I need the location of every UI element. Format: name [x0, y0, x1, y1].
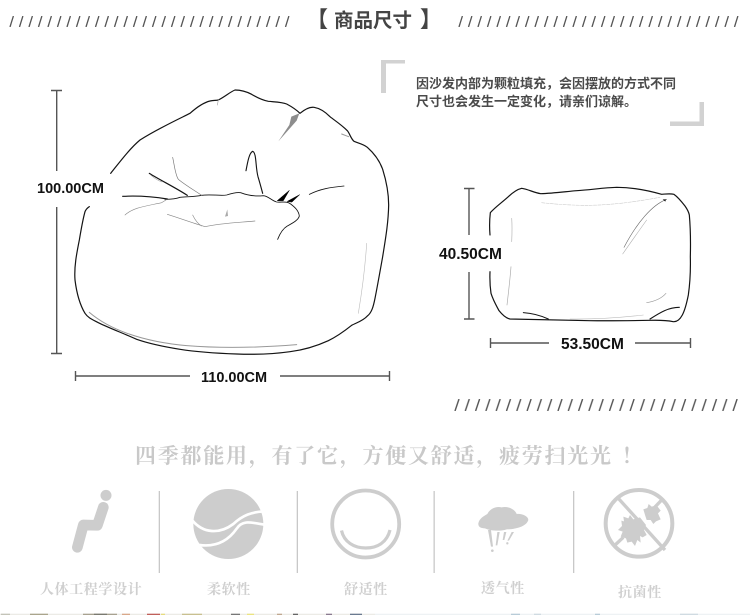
- note corner: bottom right bracket: [670, 102, 704, 126]
- divider 1: [159, 491, 160, 573]
- dimension: footstool height: [464, 188, 474, 319]
- icon: soft ball: [192, 489, 265, 559]
- label: footstool height: 40.50CM: [439, 246, 502, 263]
- icon: breathable cloud: [478, 507, 528, 552]
- inner fold lines: [542, 197, 660, 205]
- title: [306, 2, 442, 34]
- divider 3: [434, 491, 435, 573]
- feature labels: 抗菌性: [618, 582, 662, 602]
- feature labels: 舒适性: [344, 579, 388, 599]
- hook fold: [246, 151, 263, 193]
- label: chair height: 100.00CM: [37, 181, 104, 197]
- note text: [416, 73, 676, 110]
- gray crease: [278, 113, 299, 141]
- faint right edge line: [358, 243, 367, 313]
- label: chair width: 110.00CM: [201, 370, 267, 386]
- divider 2: [297, 491, 298, 573]
- bean bag chair drawing: [75, 90, 389, 354]
- black wedges: [277, 190, 289, 201]
- chair outline: [75, 90, 389, 354]
- dimension: chair width: [76, 371, 390, 381]
- label: footstool width: 53.50CM: [561, 336, 624, 353]
- slash band: lower right: [454, 399, 738, 411]
- slash band: top right: [458, 16, 743, 27]
- note text: 因沙发内部为颗粒填充，会因摆放的方式不同: [416, 73, 676, 92]
- footstool outline: [490, 187, 691, 322]
- title: 【: [306, 2, 328, 34]
- bottom colour strip: [0, 614, 750, 615]
- headline: 四季都能用，有了它，方便又舒适，疲劳扫光光 ！: [135, 440, 644, 470]
- slash band: top left: [9, 16, 294, 27]
- footstool drawing: [490, 187, 691, 322]
- dimension: chair height: [51, 90, 62, 354]
- divider 4: [573, 491, 574, 573]
- seat folds: [123, 196, 167, 199]
- title: 】: [420, 2, 442, 34]
- dimension: footstool width: [490, 338, 690, 348]
- note text: 尺寸也会发生一定变化，请亲们谅解。: [416, 91, 637, 110]
- title: 商品尺寸: [334, 4, 412, 33]
- feature labels: 柔软性: [207, 579, 251, 599]
- icon: antibacterial: [606, 490, 672, 557]
- icon: smile: [332, 490, 399, 558]
- icon: seated person: [77, 490, 111, 547]
- feature labels: 透气性: [481, 578, 525, 598]
- feature labels: 人体工程学设计: [40, 579, 142, 599]
- feature labels: [40, 578, 662, 602]
- note corner: top left bracket: [381, 60, 405, 93]
- bottom inner seam: [89, 312, 297, 347]
